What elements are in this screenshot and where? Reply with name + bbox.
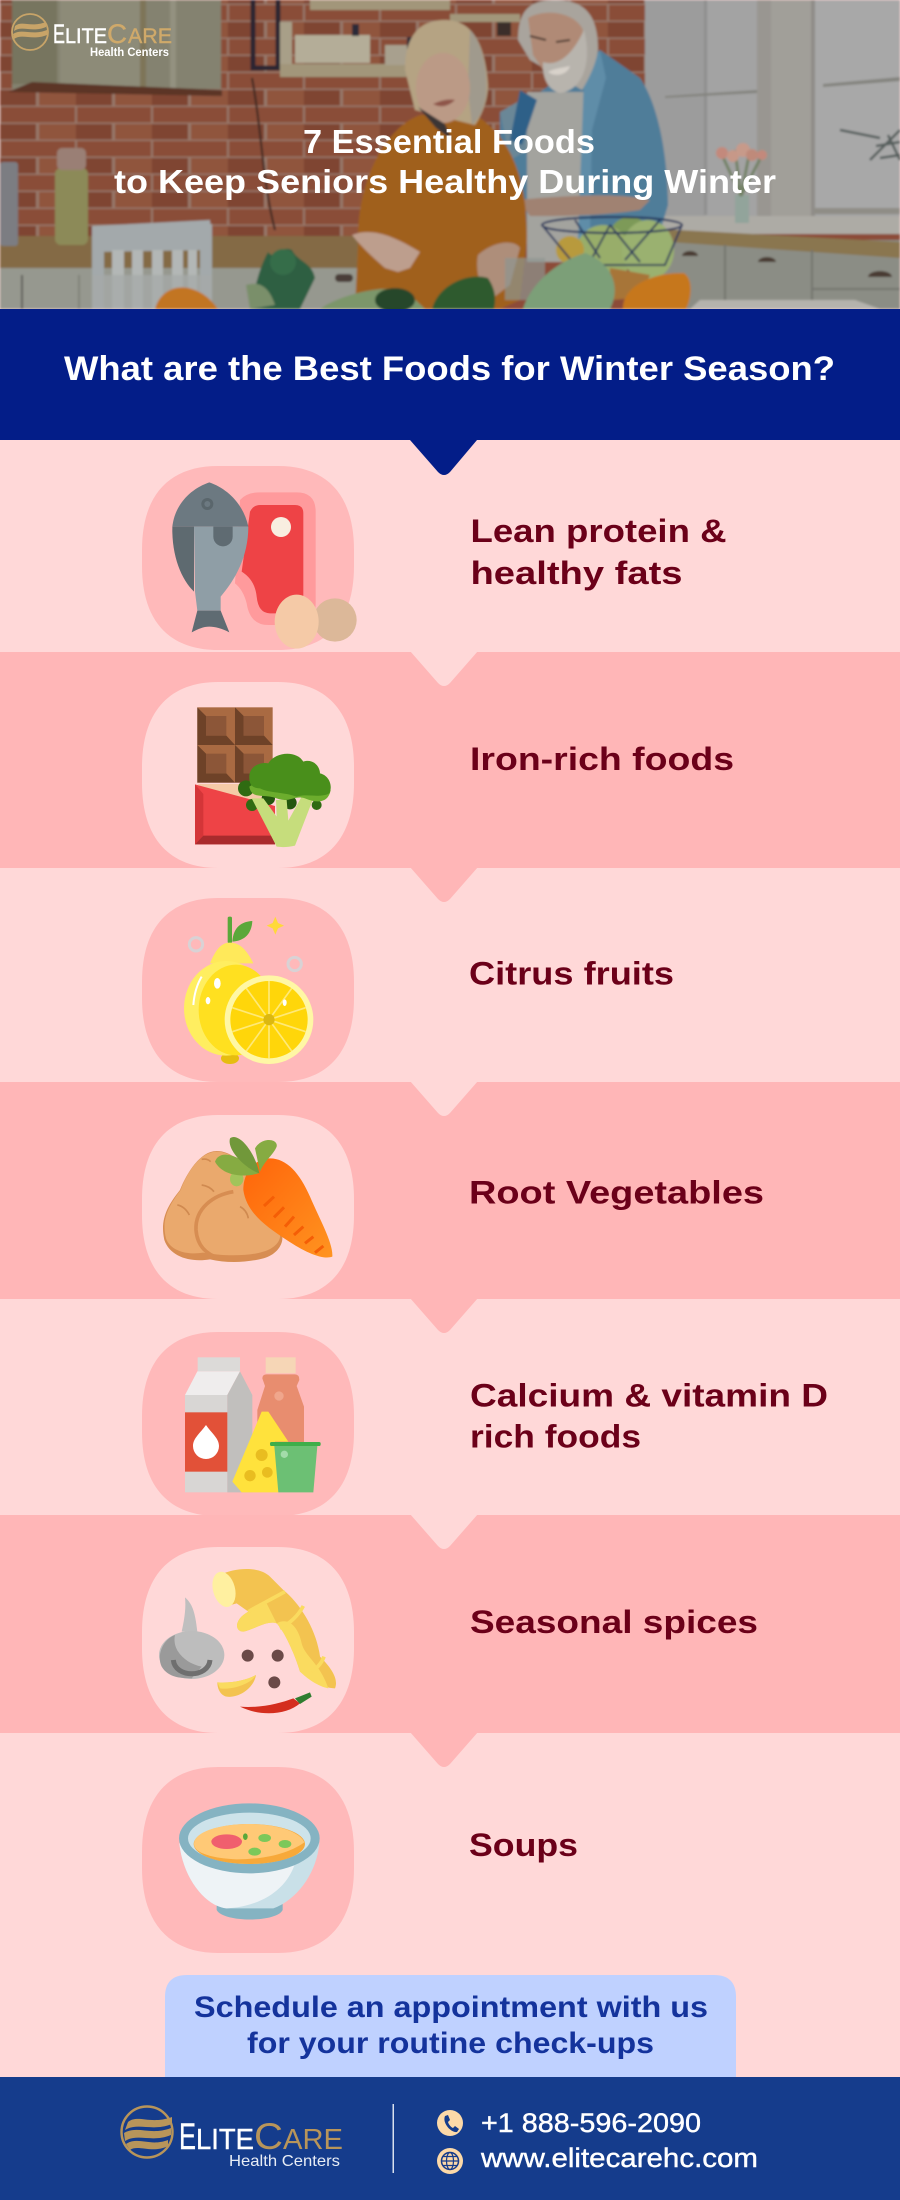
header logo bbox=[12, 14, 172, 59]
houseplant bbox=[840, 130, 900, 160]
woman bbox=[352, 20, 527, 309]
footer logo: LITE bbox=[196, 2124, 254, 2156]
label: healthy fats bbox=[470, 555, 682, 591]
hero title: 7 Essential Foods bbox=[303, 123, 595, 160]
footer logo: Health Centers bbox=[229, 2153, 340, 2170]
icon: lemon bbox=[184, 917, 313, 1064]
footer bbox=[0, 2077, 900, 2200]
label: Iron-rich foods bbox=[470, 741, 734, 777]
blob bbox=[142, 1767, 354, 1953]
blob bbox=[142, 898, 354, 1082]
website: www.elitecarehc.com bbox=[480, 2143, 758, 2173]
jar and bottle bbox=[0, 148, 88, 246]
notch from the row above bbox=[410, 867, 478, 902]
label bbox=[470, 1378, 828, 1454]
row: Iron-rich foods bbox=[0, 651, 900, 868]
notch from the row above bbox=[410, 1298, 478, 1333]
call to action: for your routine check-ups bbox=[247, 2027, 654, 2060]
label: rich foods bbox=[470, 1418, 641, 1454]
footer logo: E bbox=[179, 2116, 196, 2157]
icon: garlic, ginger, pepper and chili bbox=[159, 1569, 336, 1713]
notch from the row above bbox=[410, 1732, 478, 1767]
banner pointer bbox=[410, 440, 477, 475]
hero title bbox=[114, 123, 776, 200]
header logo: LITE bbox=[65, 25, 107, 48]
row: Seasonal spices bbox=[0, 1514, 900, 1733]
label: Soups bbox=[469, 1827, 578, 1863]
shelves and wall items bbox=[252, 0, 520, 230]
label: Citrus fruits bbox=[469, 956, 674, 992]
footer logo: ARE bbox=[283, 2124, 343, 2156]
header logo: E bbox=[53, 19, 65, 49]
label: Lean protein & bbox=[470, 513, 726, 549]
phone number: +1 888-596-2090 bbox=[481, 2108, 701, 2138]
blob bbox=[142, 1115, 354, 1299]
notch from the row above bbox=[410, 1514, 478, 1549]
man bbox=[500, 0, 668, 262]
header logo: ARE bbox=[128, 25, 172, 48]
footer logo: C bbox=[254, 2116, 283, 2157]
hero photo: seniors cooking in a kitchen bbox=[0, 0, 900, 312]
icon: phone bbox=[437, 2110, 463, 2136]
label: Calcium & vitamin D bbox=[470, 1378, 828, 1414]
notch from the row above bbox=[410, 651, 478, 686]
icon: soup bowl bbox=[179, 1803, 320, 1919]
row: Root Vegetables bbox=[0, 1081, 900, 1299]
header logo: C bbox=[107, 19, 127, 49]
icon: potatoes and carrot bbox=[163, 1137, 332, 1262]
label: Root Vegetables bbox=[469, 1174, 764, 1210]
blob bbox=[142, 682, 354, 868]
vegetables on the table bbox=[155, 249, 880, 312]
icon: chocolate bar and broccoli bbox=[195, 707, 331, 847]
label bbox=[470, 513, 726, 591]
row: Lean protein and healthy fats bbox=[0, 440, 900, 652]
fruit basket bbox=[505, 217, 682, 300]
hero title: to Keep Seniors Healthy During Winter bbox=[114, 163, 776, 200]
question banner bbox=[0, 309, 900, 440]
icon: fish, steak and eggs bbox=[172, 482, 357, 649]
row: Soups bbox=[0, 1732, 900, 2078]
chair bbox=[92, 220, 212, 309]
question banner: What are the Best Foods for Winter Season? bbox=[64, 350, 835, 388]
call to action bbox=[165, 1975, 736, 2078]
blob bbox=[142, 466, 354, 650]
tulips in vase bbox=[716, 143, 767, 223]
row: Citrus fruits bbox=[0, 867, 900, 1082]
label: Seasonal spices bbox=[470, 1604, 758, 1640]
footer divider bbox=[392, 2104, 394, 2173]
blob bbox=[142, 1547, 354, 1733]
footer logo bbox=[122, 2106, 343, 2170]
icon: globe bbox=[437, 2148, 463, 2174]
blob bbox=[142, 1332, 354, 1516]
worktop and lower cabinets on the left bbox=[0, 236, 370, 309]
window and right side of the kitchen bbox=[640, 0, 900, 309]
icon: milk, bottle, cheese and yogurt bbox=[185, 1357, 321, 1492]
header logo: Health Centers bbox=[90, 45, 169, 59]
notch from the row above bbox=[410, 1081, 478, 1116]
row: Calcium and vitamin D rich foods bbox=[0, 1298, 900, 1516]
wall cabinet bbox=[8, 0, 222, 96]
call to action: Schedule an appointment with us bbox=[194, 1991, 708, 2024]
